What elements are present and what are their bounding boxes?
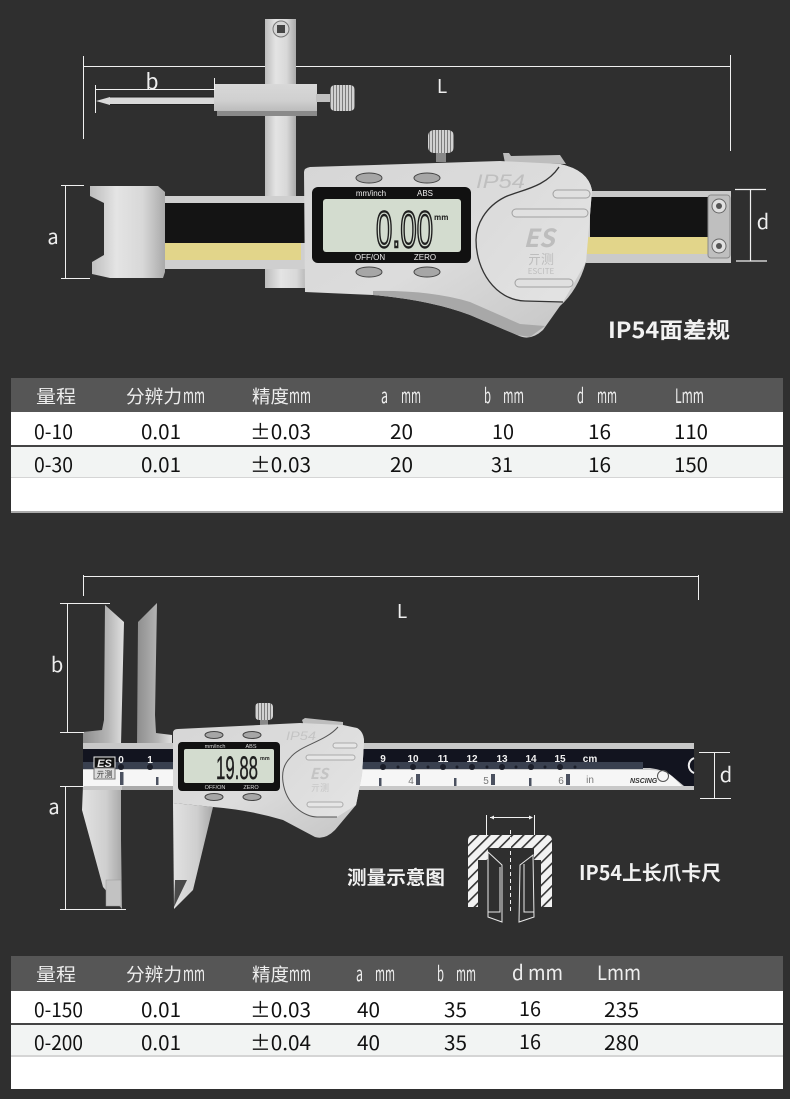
dimension a: a xyxy=(47,221,59,250)
dimension a xyxy=(47,186,90,278)
display: OFF/ON xyxy=(205,785,225,791)
ruler inch scale: NSCING xyxy=(630,778,658,785)
display: mm/inch xyxy=(205,744,225,750)
left beam xyxy=(160,196,306,269)
row 0-150: 235 xyxy=(604,994,639,1023)
table header: b xyxy=(437,958,444,987)
ruler cm numbers: 15 xyxy=(554,754,566,765)
lock lever xyxy=(302,718,343,727)
row 0-30: ±0.03 xyxy=(250,449,311,478)
row 0-30: 150 xyxy=(674,449,708,478)
row 0-10: 16 xyxy=(588,416,611,445)
table header: mm xyxy=(289,380,311,409)
ruler cm numbers: 14 xyxy=(525,754,537,765)
ruler cm numbers xyxy=(118,754,597,766)
measuring diagram xyxy=(468,815,552,922)
row 0-150: ±0.03 xyxy=(250,994,311,1023)
sliding depth block with needle and knob xyxy=(96,84,355,116)
dimension d: d xyxy=(720,759,732,788)
panel: IP54 long upper jaw caliper xyxy=(48,575,732,922)
panel: IP54 flush gauge caliper xyxy=(47,19,769,345)
left end block xyxy=(90,186,165,278)
ruler cm numbers: 10 xyxy=(407,754,419,765)
display: mm xyxy=(260,755,270,762)
row 0-10 xyxy=(34,416,708,445)
table header: d mm xyxy=(512,957,563,986)
row 0-200: 16 xyxy=(519,1026,541,1055)
table header: a xyxy=(356,958,363,987)
table header xyxy=(11,378,783,412)
table: second spec xyxy=(11,956,783,1089)
table header: b xyxy=(484,380,491,409)
row 0-150: 0.01 xyxy=(141,994,181,1023)
table header: mm xyxy=(183,958,205,987)
end plate with screws xyxy=(708,195,730,258)
right beam xyxy=(586,191,731,263)
display: ZERO xyxy=(414,253,436,262)
embossed logo: ESCITE xyxy=(528,266,555,277)
dimension d: d xyxy=(757,206,769,235)
right cover xyxy=(476,164,592,302)
embossed logo: 亓测 xyxy=(528,249,554,268)
ES ruler logo: ES xyxy=(97,758,112,770)
top knob xyxy=(428,130,454,162)
dimension L: L xyxy=(437,72,447,99)
diagram caption: 测量示意图 xyxy=(347,863,445,890)
embossed logo: 亓测 xyxy=(311,781,329,794)
display: 0.00 xyxy=(376,201,433,258)
main body xyxy=(304,161,592,338)
row 0-200: 280 xyxy=(604,1027,639,1056)
table header: mm xyxy=(597,380,617,409)
title: IP54面差规 xyxy=(608,313,730,345)
row 0-150: 40 xyxy=(357,994,380,1023)
display: OFF/ON xyxy=(355,253,385,262)
ruler cm numbers: 0 xyxy=(118,755,124,766)
dimension b: b xyxy=(51,649,63,678)
ruler inch scale: 6 xyxy=(558,776,564,787)
table header: mm xyxy=(183,380,205,409)
table header: 精度 xyxy=(252,383,289,409)
ruler cm numbers: 13 xyxy=(496,754,508,765)
display xyxy=(312,187,471,263)
ES ruler logo: 亓测 xyxy=(96,769,112,780)
row 0-10: 0-10 xyxy=(34,416,73,445)
movable jaw xyxy=(137,603,213,909)
display: mm xyxy=(434,212,448,223)
table header: 分辨力 xyxy=(126,383,182,409)
table header: 分辨力 xyxy=(126,961,182,987)
dimension L: L xyxy=(397,597,407,624)
fixed jaw xyxy=(82,605,124,909)
row 0-200: ±0.04 xyxy=(250,1027,311,1056)
table header: Lmm xyxy=(597,957,641,986)
dimension d xyxy=(735,190,769,261)
ruler cm numbers: 1 xyxy=(147,755,153,766)
dimension b: b xyxy=(146,66,158,96)
dimension L xyxy=(84,575,698,624)
row 0-150: 35 xyxy=(444,994,467,1023)
row 0-30: 20 xyxy=(390,449,413,478)
row 0-200: 0.01 xyxy=(141,1027,181,1056)
row 0-10: 110 xyxy=(674,416,708,445)
display: ABS xyxy=(417,189,433,198)
ruler dots xyxy=(118,764,576,770)
table header: a xyxy=(381,380,388,409)
table header: mm xyxy=(456,958,476,987)
row 0-10: 20 xyxy=(390,416,413,445)
row 0-10: 10 xyxy=(492,416,514,445)
right cover xyxy=(283,727,364,817)
row 0-10: 0.01 xyxy=(141,416,181,445)
embossed logo: ES xyxy=(310,763,330,784)
row 0-150: 16 xyxy=(519,993,541,1022)
ruler cm numbers: 11 xyxy=(438,754,449,765)
display xyxy=(178,742,280,791)
row 0-30: 0.01 xyxy=(141,449,181,478)
dimension L xyxy=(84,55,730,151)
ruler cm numbers: 9 xyxy=(380,754,386,765)
ruler inch scale: 4 xyxy=(408,776,414,787)
display: ABS xyxy=(245,744,257,750)
scale beam xyxy=(83,743,694,790)
row 0-30: 31 xyxy=(491,449,513,478)
table header: Lmm xyxy=(675,380,704,409)
ruler inch scale: 5 xyxy=(483,776,489,787)
main body xyxy=(173,723,364,838)
buttons xyxy=(205,732,261,800)
title: IP54上长爪卡尺 xyxy=(579,857,721,886)
table header: mm xyxy=(375,958,395,987)
table header: mm xyxy=(503,380,524,409)
ruler inch scale: in xyxy=(586,775,594,786)
row 0-150: 0-150 xyxy=(34,994,83,1023)
table header: mm xyxy=(289,958,311,987)
ES ruler logo xyxy=(94,757,115,780)
embossed logo xyxy=(524,219,558,277)
row 0-150 xyxy=(34,993,639,1023)
embossed logo: ES xyxy=(524,219,558,255)
dimension a xyxy=(48,786,126,910)
ruler cm numbers: 12 xyxy=(466,754,478,765)
display: mm/inch xyxy=(356,189,386,198)
embossed IP54 mark: IP54 xyxy=(286,729,316,743)
embossed logo xyxy=(310,763,330,794)
embossed IP54 mark: IP54 xyxy=(476,172,525,193)
row 0-30: 16 xyxy=(588,449,611,478)
depth bar xyxy=(265,19,310,288)
row 0-30: 0-30 xyxy=(34,449,73,478)
row 0-200: 40 xyxy=(357,1027,380,1056)
row 0-200: 0-200 xyxy=(34,1027,83,1056)
dimension b xyxy=(51,604,110,732)
row 0-10: ±0.03 xyxy=(250,416,311,445)
dimension d xyxy=(699,752,732,798)
dimension a: a xyxy=(48,791,60,820)
dimension b xyxy=(96,66,214,113)
lock lever xyxy=(503,153,566,164)
table: first spec xyxy=(11,378,783,513)
table header: 量程 xyxy=(36,383,76,409)
row 0-200 xyxy=(11,1025,783,1056)
display: ZERO xyxy=(243,785,259,791)
ruler cm numbers: cm xyxy=(583,754,597,765)
lower body shadow band xyxy=(373,291,545,337)
display: 19.88 xyxy=(216,750,258,786)
table header: 量程 xyxy=(36,961,76,987)
buttons xyxy=(356,173,440,277)
table header: mm xyxy=(401,380,421,409)
table header: d xyxy=(577,380,584,409)
ruler inch scale xyxy=(120,770,668,787)
table header: 精度 xyxy=(252,961,289,987)
top knob xyxy=(255,703,273,725)
row 0-200: 35 xyxy=(444,1027,467,1056)
row 0-30 xyxy=(11,447,783,478)
table header xyxy=(11,956,783,991)
